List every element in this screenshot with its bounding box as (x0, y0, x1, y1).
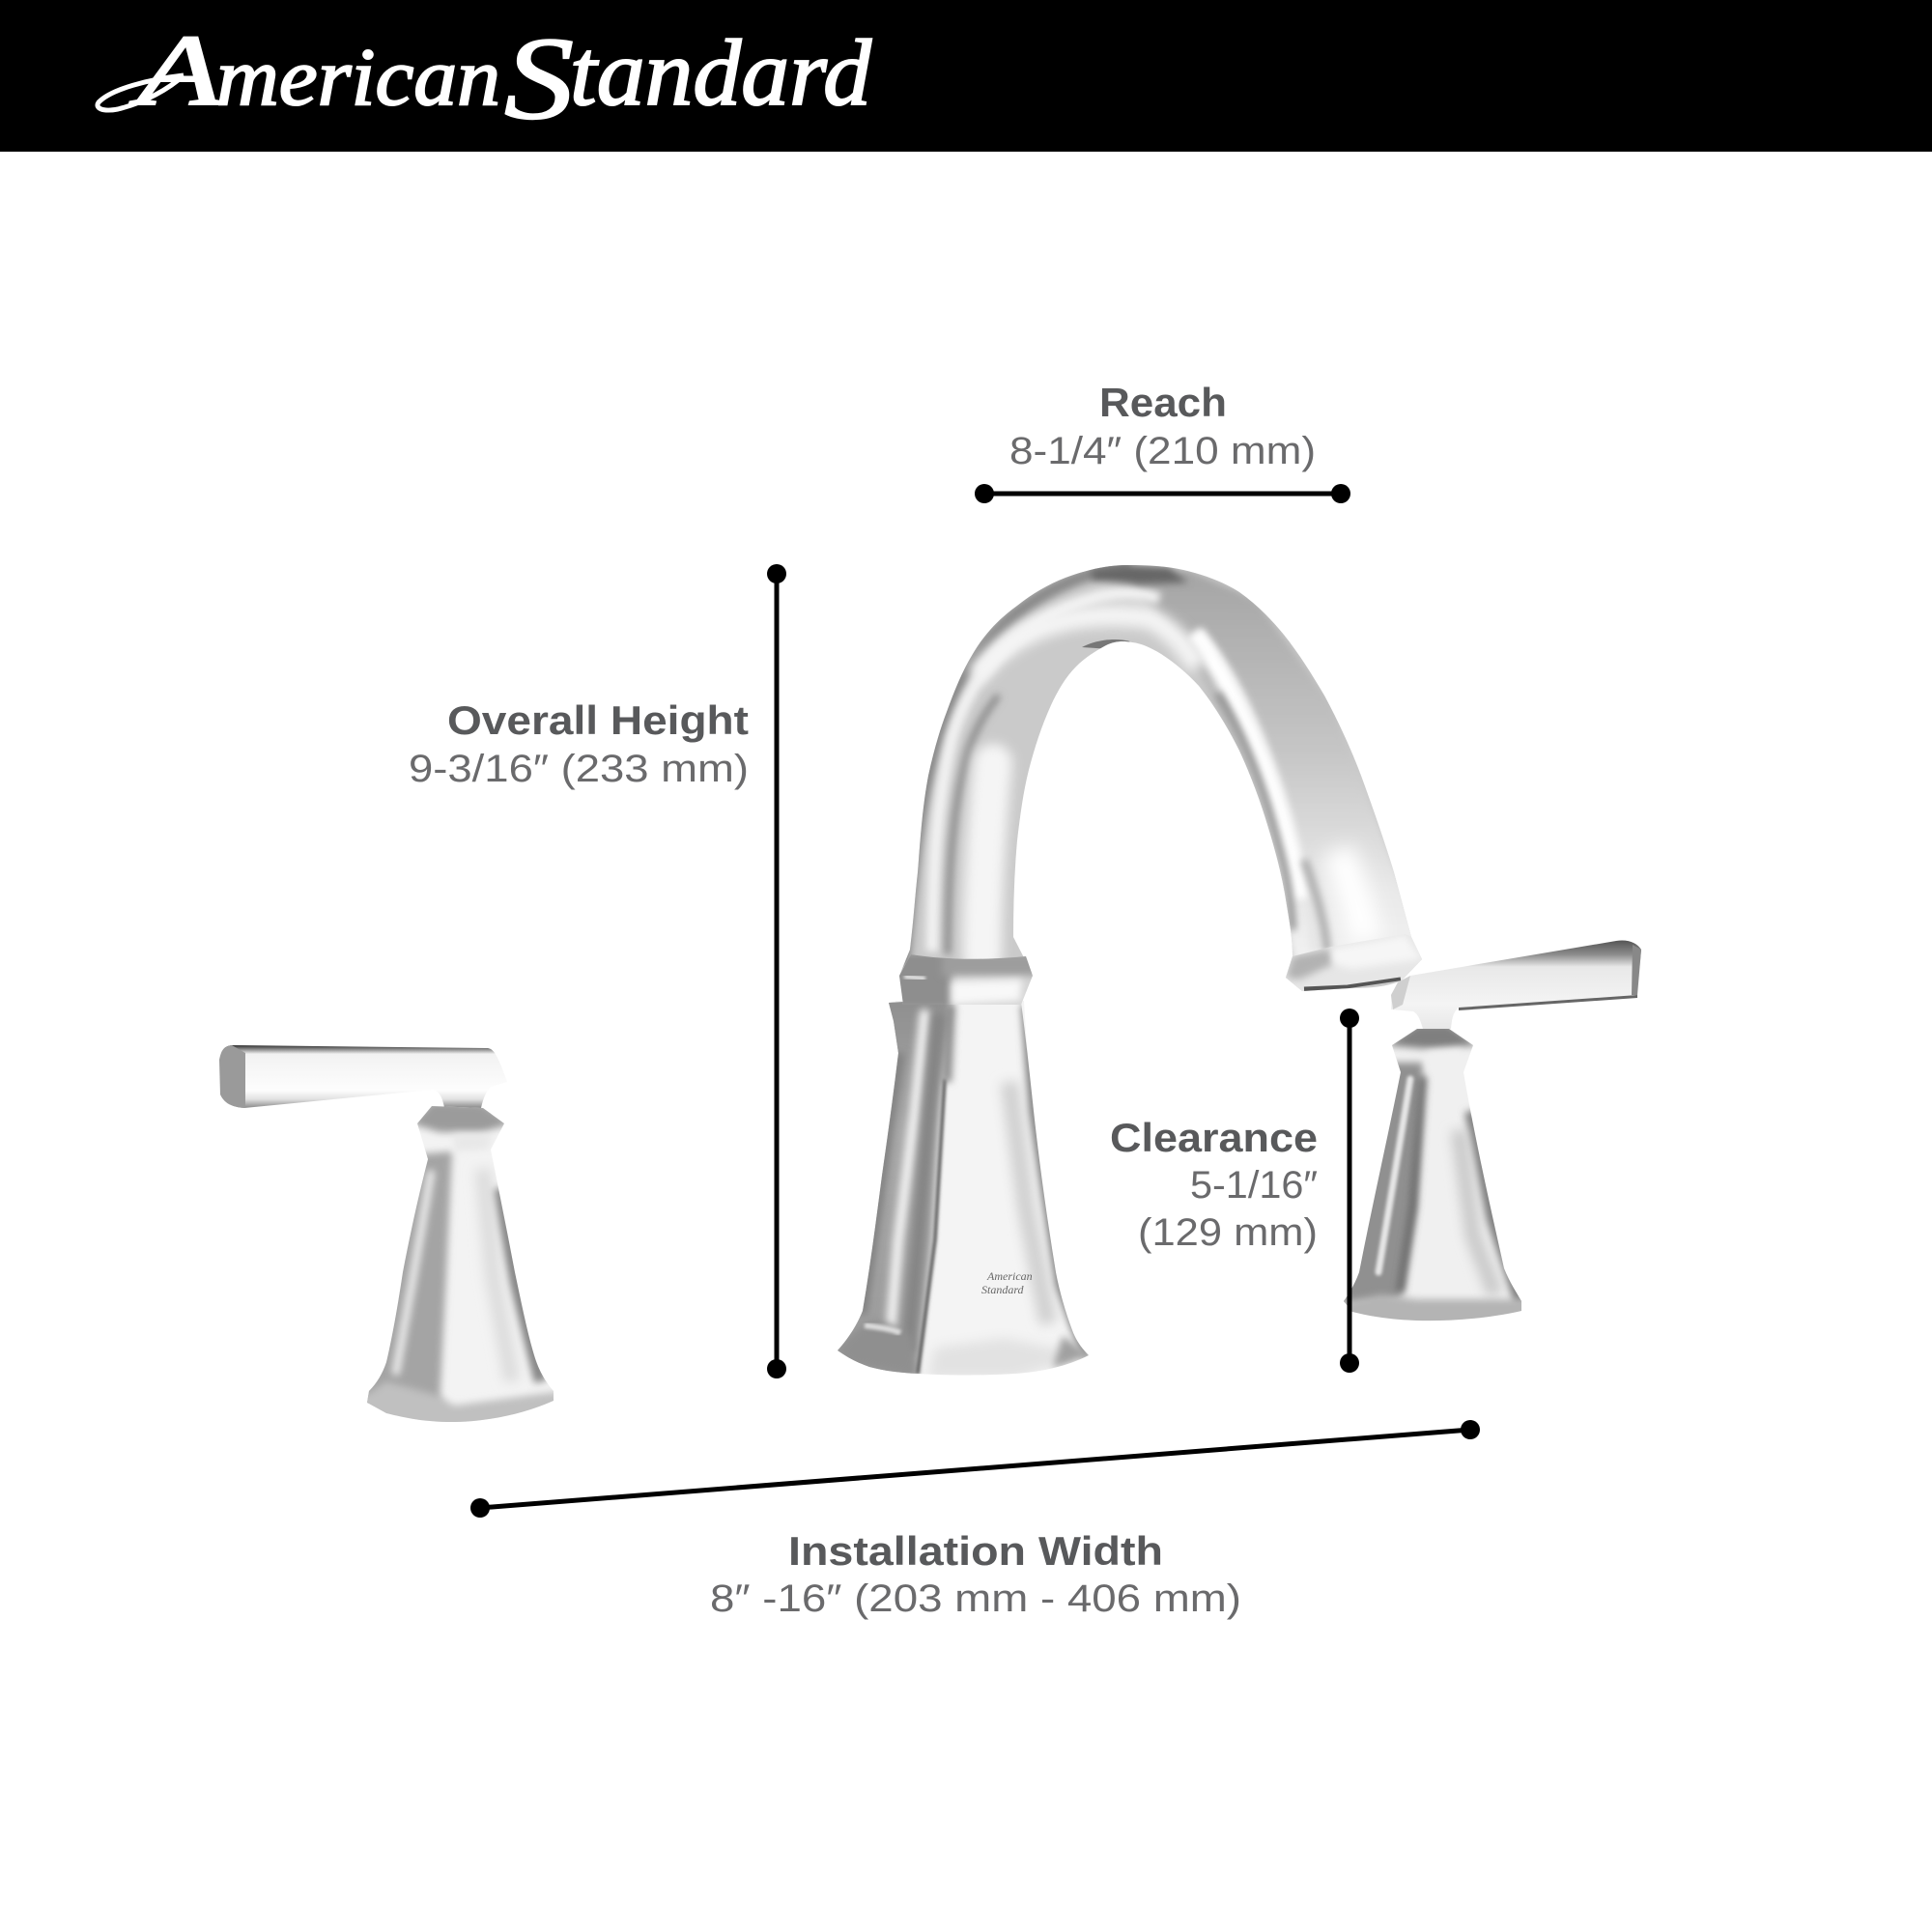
left facet (838, 1002, 954, 1374)
dimension line: overall height (767, 564, 786, 1378)
top dark reflection (1092, 565, 1188, 584)
dimension line: installation width (470, 1420, 1480, 1518)
collar ring (899, 954, 1033, 1005)
pop-up knob (889, 1002, 904, 1058)
logo wordmark (98, 14, 872, 144)
right knob (1344, 1029, 1521, 1321)
logo wordmark: S (504, 14, 574, 144)
right facet shading (1026, 1005, 1087, 1357)
label: clearance: Clearance (1110, 1115, 1318, 1160)
label: overall height: Overall Height (447, 697, 749, 743)
spout tip collar (1287, 939, 1422, 991)
left lever (219, 1045, 507, 1108)
label: reach: 8-1/4″ (210 mm) (1009, 430, 1316, 472)
label: overall height (409, 697, 749, 790)
etched logo on base: American (986, 1269, 1033, 1283)
faucet: left lever handle (219, 1045, 560, 1430)
right arm (1130, 570, 1430, 966)
label: clearance: (129 mm) (1138, 1211, 1318, 1254)
label: installation width: Installation Width (788, 1528, 1163, 1574)
label: installation width: 8″ -16″ (203 mm - 406 mm) (710, 1577, 1241, 1620)
label: reach: Reach (1099, 380, 1227, 425)
left arm (903, 564, 1130, 966)
logo wordmark: tandard (570, 21, 872, 125)
logo wordmark: A (129, 14, 223, 127)
seam (918, 1079, 945, 1374)
label: clearance: 5-1/16″ (1190, 1164, 1318, 1207)
dimension line: clearance (1340, 1009, 1359, 1373)
etched logo on base (981, 1269, 1033, 1296)
right lever (1391, 940, 1641, 1029)
label: clearance (1110, 1115, 1318, 1254)
etched logo on base: Standard (981, 1283, 1025, 1296)
left knob (367, 1106, 554, 1422)
label: overall height: 9-3/16″ (233 mm) (409, 748, 749, 790)
header banner with brand logo (0, 0, 1932, 152)
spout arc (899, 565, 1422, 991)
dimension line: reach (975, 484, 1350, 503)
spout base cone (821, 995, 1090, 1381)
label: reach (1009, 380, 1316, 472)
logo swash flourish (98, 75, 184, 110)
label: installation width (710, 1528, 1241, 1620)
faucet: right lever handle (1334, 940, 1641, 1331)
faucet: central spout (821, 551, 1439, 1381)
logo wordmark: merican (216, 32, 500, 123)
